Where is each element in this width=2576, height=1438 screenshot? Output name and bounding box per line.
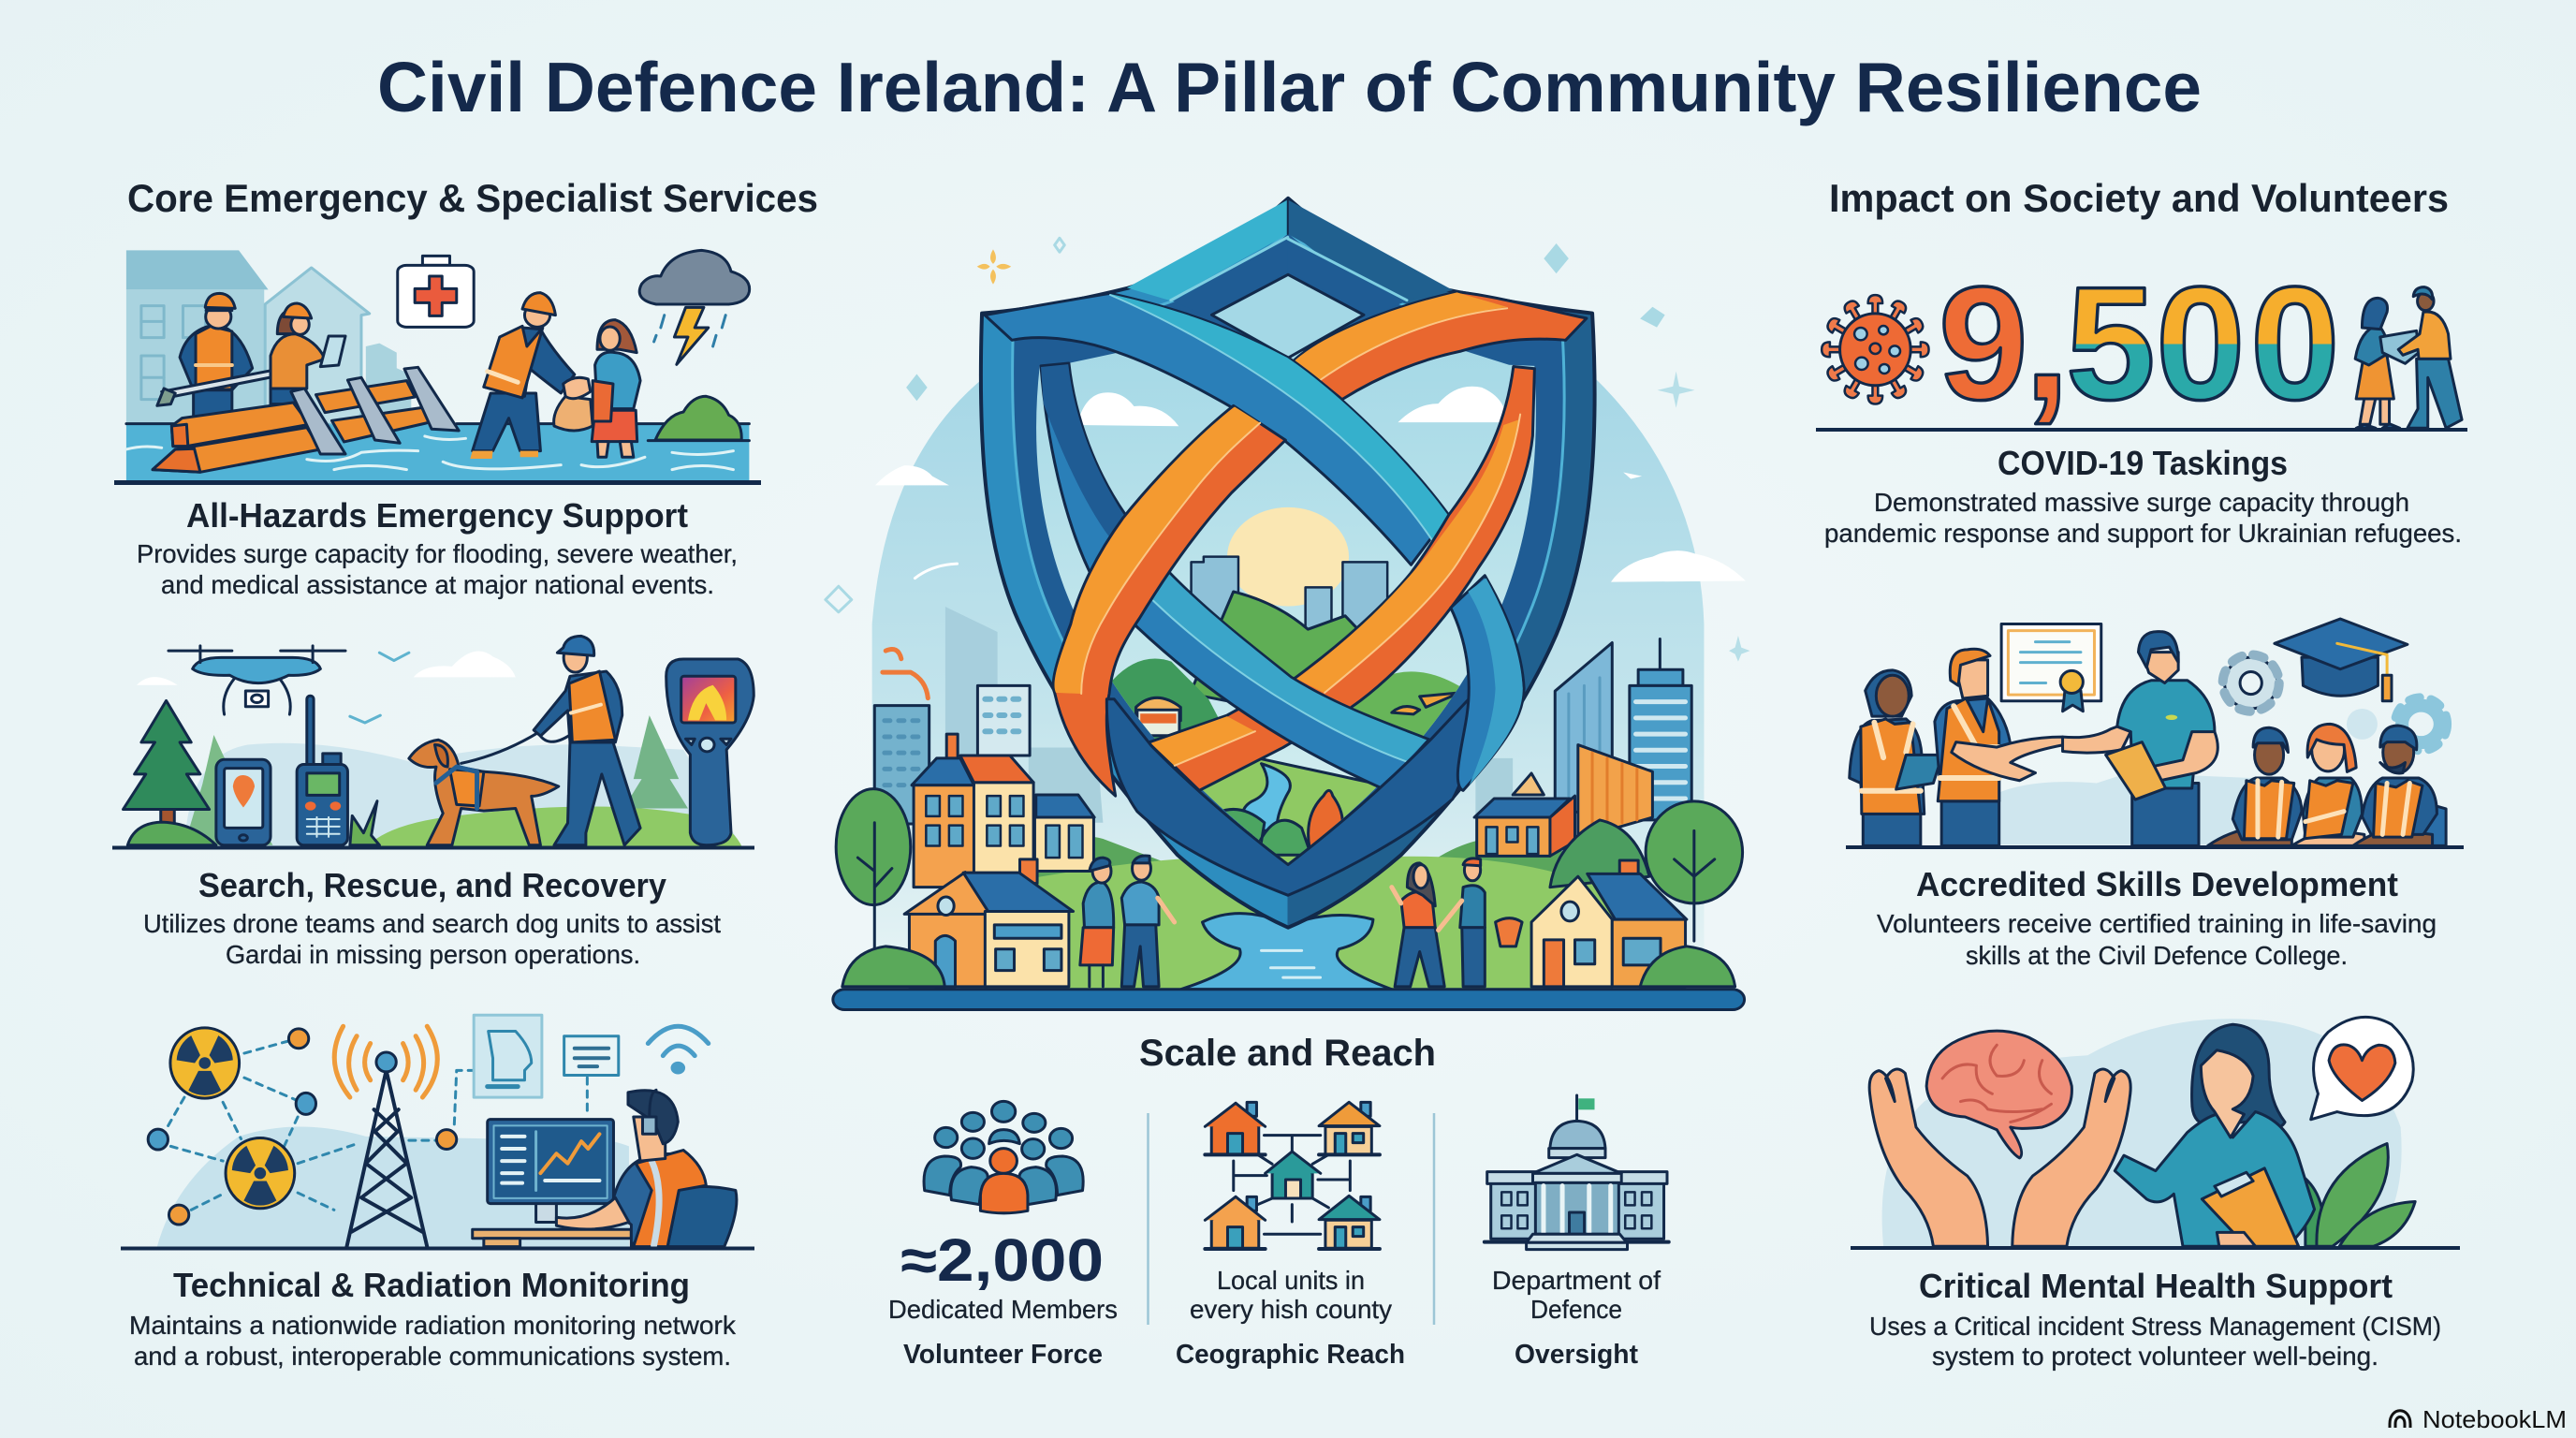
icon: wifi signal: [648, 1026, 709, 1074]
blue band lower: [1041, 363, 1429, 789]
icon: data panel: [564, 1036, 619, 1076]
label: department of defence: Department of: [1492, 1266, 1661, 1295]
item text: mental health: Uses a Critical incident Stress Management (CISM): [1869, 1312, 2441, 1341]
caption: volunteer force: Volunteer Force: [903, 1340, 1103, 1370]
upper shield chevrons: [1127, 199, 1453, 316]
title: Civil Defence Ireland: A Pillar of Community Resilience: [377, 48, 2202, 126]
item: technical and radiation monitoring: [121, 1015, 754, 1371]
sky arch: [872, 376, 1704, 987]
trainee shaking hands: [1935, 649, 2065, 845]
panel: scale and reach: [888, 1033, 1669, 1370]
panel: impact on society and volunteers: [1816, 176, 2467, 1371]
illustration: mental health care: [1869, 1017, 2415, 1246]
icon: virus: [1822, 295, 1929, 404]
item text: search: Gardai in missing person operations.: [226, 940, 640, 969]
sparkles, clouds and birds: [826, 238, 1750, 662]
item text: mental health: [1869, 1312, 2441, 1371]
illustration: search and rescue: [124, 636, 754, 847]
figure: 9,500: 9: [1939, 254, 2028, 433]
worker with tablet: [271, 303, 345, 404]
panel: core emergency and specialist services: [112, 176, 818, 1371]
background skyline left: [874, 607, 1103, 824]
rule: [121, 1247, 754, 1251]
worker passing bag: [470, 293, 575, 459]
heading: impact: Impact on Society and Volunteers: [1829, 176, 2449, 220]
figure: 9,500: 5: [2066, 254, 2156, 433]
label: local units: every hish county: [1190, 1295, 1392, 1324]
label: dedicated members: Dedicated Members: [888, 1295, 1118, 1324]
people sharing aid: [2355, 287, 2462, 428]
shield: [981, 198, 1595, 928]
icon: certificate: [2001, 624, 2101, 712]
woman receiving bag: [554, 320, 640, 457]
orange band right: [1149, 366, 1534, 790]
rule: [112, 846, 754, 850]
icon: government building: [1485, 1095, 1669, 1250]
illustration: certification: [1850, 619, 2448, 845]
rule: [1816, 428, 2467, 432]
icon: gears: [2223, 654, 2448, 751]
item: all-hazards emergency support: [114, 250, 761, 599]
blue band lower right: [1451, 576, 1524, 790]
people left: [1080, 856, 1175, 987]
ground and river: [960, 836, 1612, 990]
figure: 9,500: 0: [2250, 254, 2340, 433]
label: department of defence: [1492, 1266, 1661, 1324]
stat: oversight: [1485, 1095, 1669, 1370]
item text: search: [143, 909, 721, 969]
item text: all-hazards: and medical assistance at major national events.: [161, 570, 714, 599]
item text: covid-19: Demonstrated massive surge capacity through: [1874, 488, 2409, 517]
icon: group of people: [924, 1101, 1083, 1213]
item heading: all-hazards: All-Hazards Emergency Support: [186, 496, 688, 535]
item heading: search: Search, Rescue, and Recovery: [198, 866, 666, 904]
rule: [1851, 1246, 2460, 1250]
stat: geographic reach: [1176, 1102, 1405, 1370]
illustration: radiation network and operator: [148, 1015, 737, 1247]
item heading: covid-19: COVID-19 Taskings: [1998, 444, 2288, 482]
item heading: technical: Technical & Radiation Monitoring: [173, 1266, 690, 1304]
rule: [1846, 845, 2464, 849]
watermark: NotebookLM: NotebookLM: [2422, 1405, 2567, 1433]
top diamond window: [1211, 274, 1364, 358]
icon: data panel head: [474, 1015, 542, 1097]
orange band left: [1053, 405, 1285, 796]
icon: thermal camera: [666, 659, 754, 845]
heading: core services: Core Emergency & Specialist Services: [127, 176, 818, 220]
trainee with clipboard: [1850, 670, 1942, 845]
orange band upper right: [1294, 292, 1587, 400]
icon: drone: [168, 646, 345, 714]
illustration: flood response: [126, 250, 750, 481]
figure: approximately 2,000: ≈2,000: [900, 1226, 1104, 1294]
item heading: mental health: Critical Mental Health Support: [1919, 1267, 2393, 1305]
item text: mental health: system to protect volunteer well-being.: [1932, 1342, 2378, 1371]
item text: all-hazards: Provides surge capacity for flooding, severe weather,: [137, 539, 738, 568]
item text: technical: and a robust, interoperable communications system.: [134, 1342, 731, 1371]
search dog: [409, 732, 570, 845]
item: accredited skills development: [1846, 619, 2464, 970]
icon: caring hands: [1869, 1069, 2130, 1246]
icon: radio tower: [334, 1026, 437, 1247]
instructor: [2063, 632, 2217, 845]
figure: 9,500: 0: [2156, 254, 2246, 433]
icons: radiation symbols: [170, 1028, 295, 1209]
lower shield arc: [1106, 699, 1471, 895]
icon: storm cloud: [639, 250, 750, 364]
figure: 9,500: ,: [2025, 254, 2070, 433]
icon: radio: [297, 696, 347, 845]
rule: [114, 480, 761, 485]
caption: oversight: Oversight: [1515, 1340, 1638, 1370]
item: critical mental health support: [1851, 1017, 2460, 1371]
item text: covid-19: pandemic response and support for Ukrainian refugees.: [1824, 519, 2462, 548]
icon: speech bubble with heart: [2311, 1017, 2413, 1120]
label: department of defence: Defence: [1530, 1295, 1622, 1324]
icon: leaves: [2305, 1144, 2415, 1246]
icon: pine tree: [124, 700, 216, 845]
item text: covid-19: [1824, 488, 2462, 548]
item text: technical: Maintains a nationwide radiation monitoring network: [129, 1311, 737, 1340]
icon: first aid kit: [398, 256, 474, 327]
item text: all-hazards: [137, 539, 738, 599]
item text: accredited: Volunteers receive certified training in life-saving: [1877, 909, 2437, 938]
item text: technical: [129, 1311, 737, 1371]
base platform: [833, 990, 1745, 1010]
item text: accredited: [1877, 909, 2437, 970]
central illustration: shield over community: [826, 198, 1750, 1010]
seated trainees: [2208, 724, 2446, 845]
icon: brain: [1926, 1031, 2071, 1158]
scene inside shield: [1022, 333, 1550, 871]
heading: scale and reach: Scale and Reach: [1139, 1033, 1436, 1074]
icon: graduation cap: [2275, 619, 2408, 701]
stat: volunteer force: [888, 1101, 1118, 1370]
handler in vest: [534, 636, 640, 845]
divider: [1433, 1113, 1435, 1325]
divider: [1147, 1113, 1149, 1325]
worker with shovel: [157, 293, 277, 428]
sandbag wall: [153, 367, 459, 472]
operator at monitor: [473, 1090, 737, 1247]
icon: GPS phone: [216, 759, 271, 845]
counsellor: [2115, 1024, 2315, 1246]
blue band upper: [985, 293, 1449, 565]
right houses and tree: [1474, 773, 1743, 987]
label: local units: [1190, 1266, 1392, 1324]
left houses and tree: [836, 734, 1094, 987]
label: local units: Local units in: [1217, 1266, 1365, 1295]
caption: geographic reach: Ceographic Reach: [1176, 1340, 1405, 1370]
item heading: accredited: Accredited Skills Development: [1916, 865, 2398, 903]
item: search, rescue and recovery: [112, 636, 754, 969]
item: covid-19 taskings: [1816, 254, 2467, 548]
background skyline right: [1475, 638, 1691, 839]
people right: [1392, 858, 1485, 987]
item text: search: Utilizes drone teams and search dog units to assist: [143, 909, 721, 938]
item text: accredited: skills at the Civil Defence College.: [1966, 941, 2348, 970]
icon: connected houses: [1205, 1102, 1380, 1249]
